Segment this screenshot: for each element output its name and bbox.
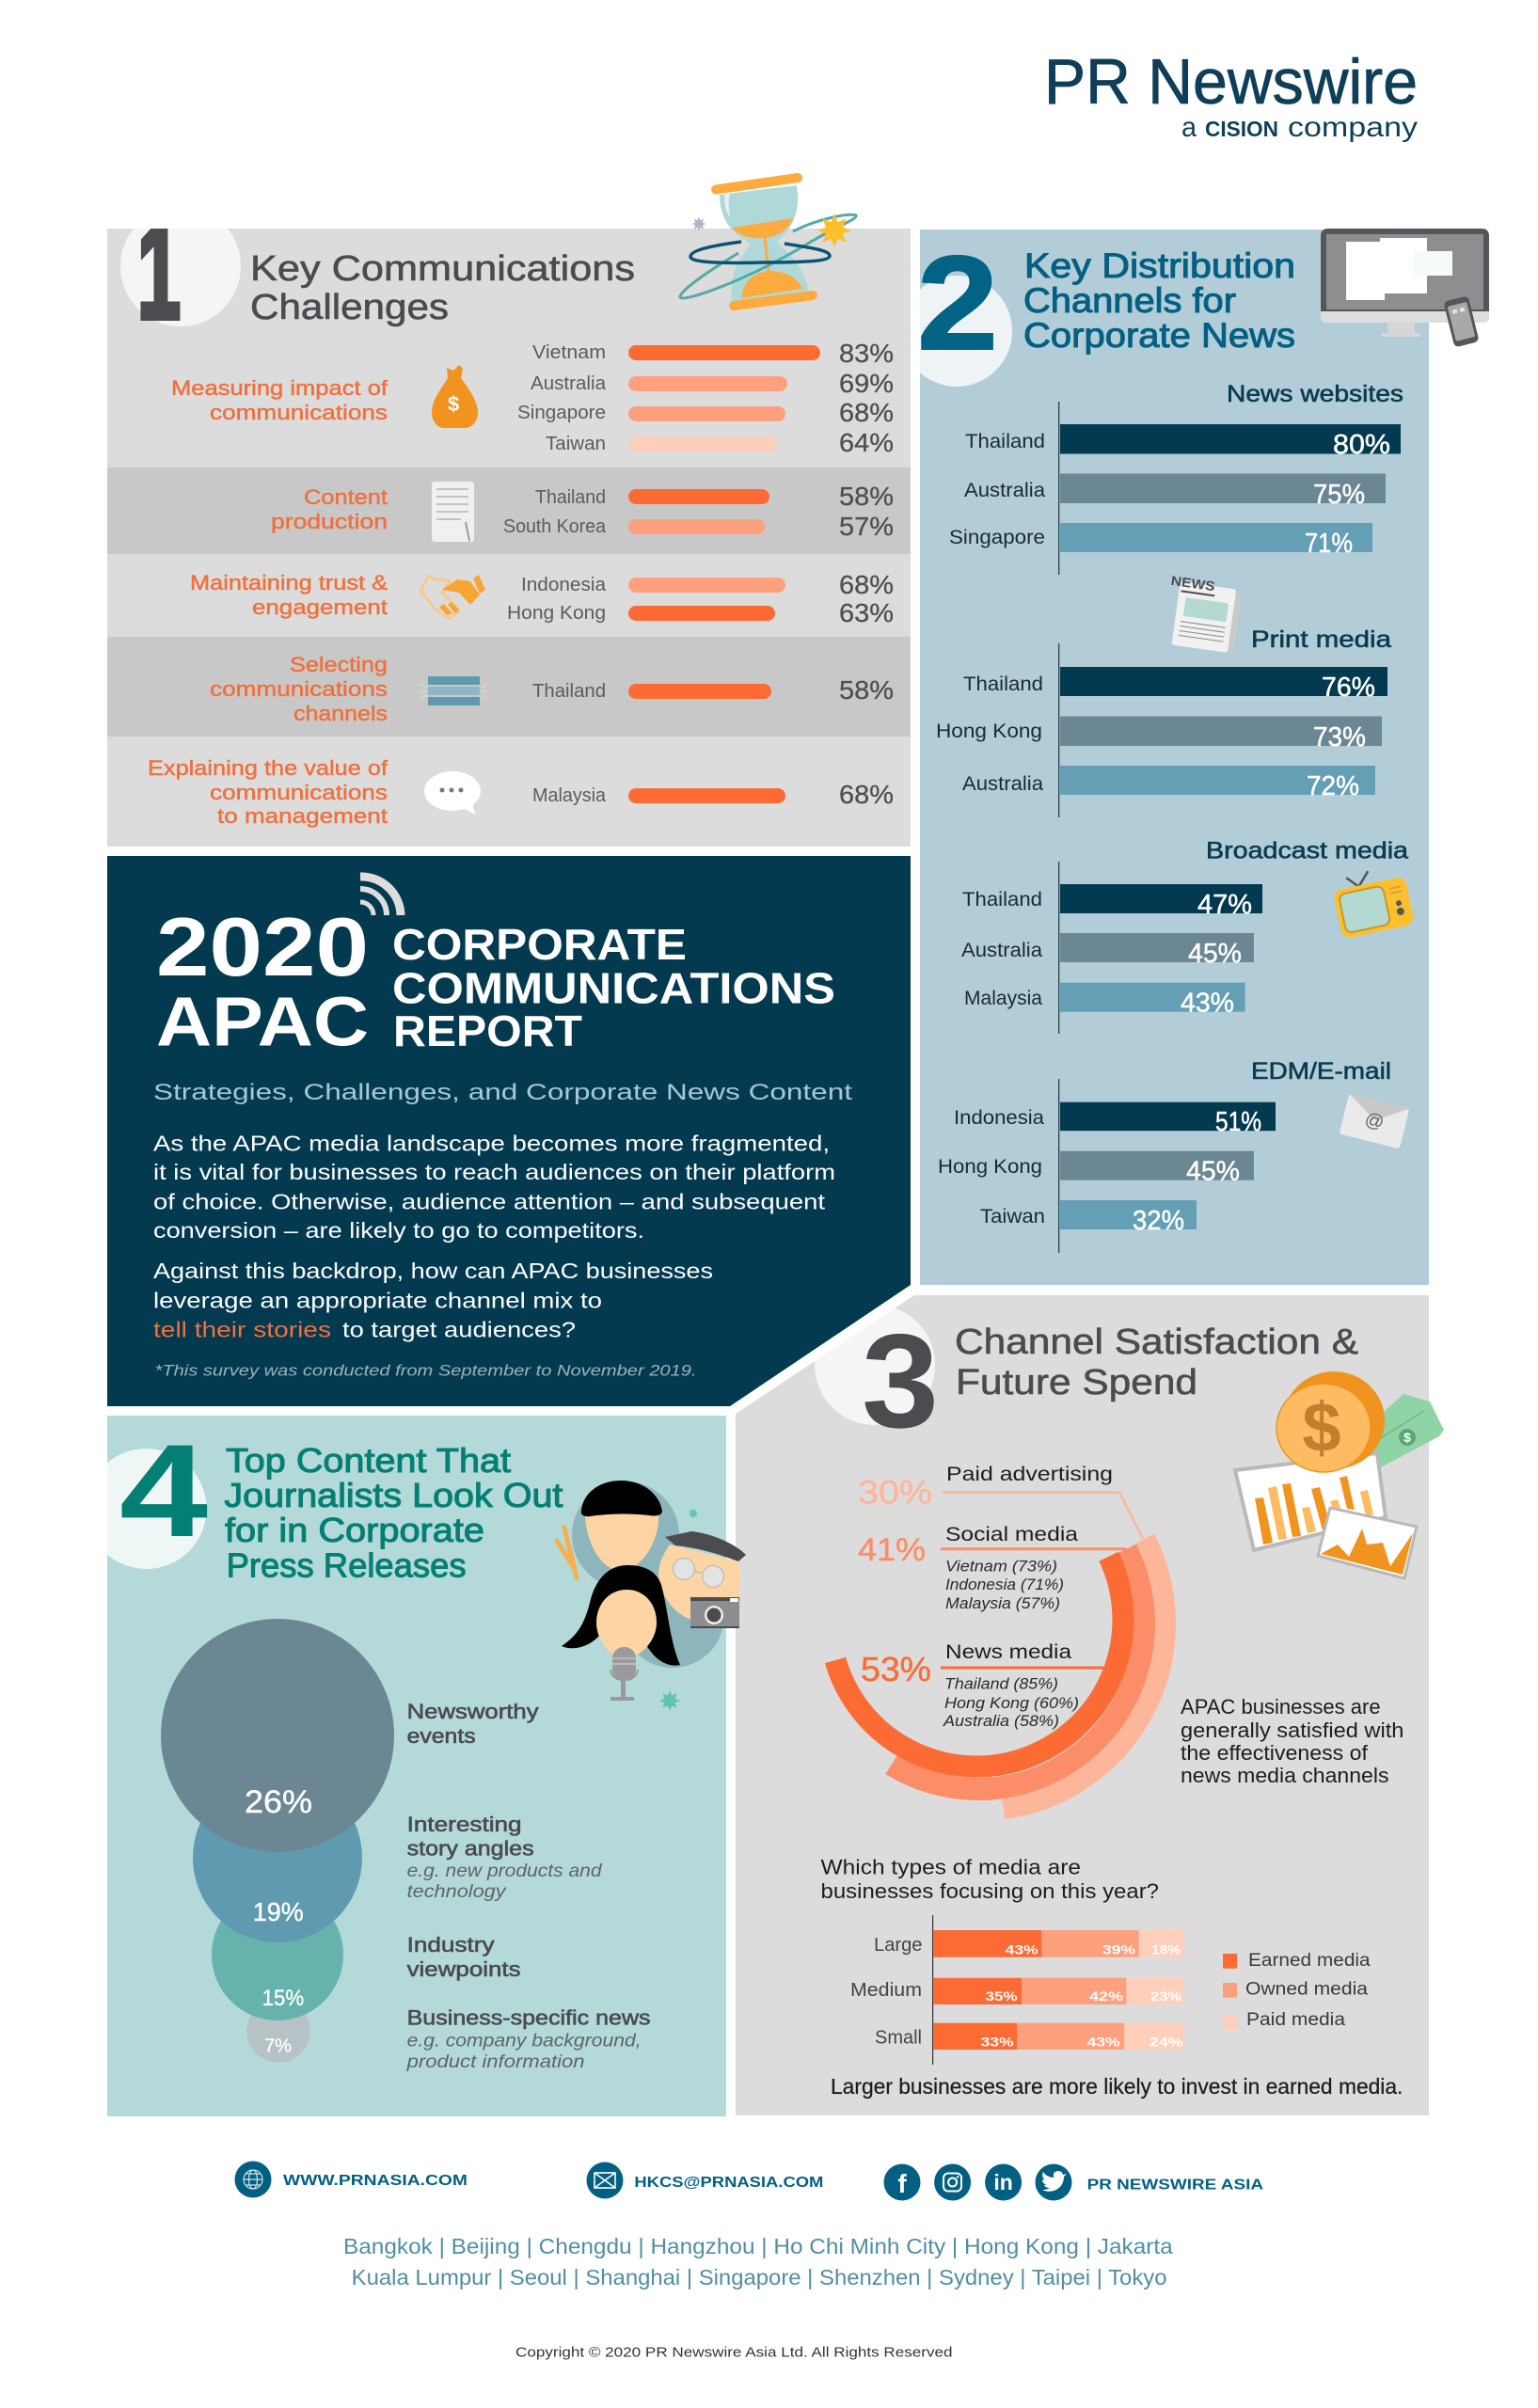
row: maintaining trust [190, 570, 894, 627]
text: satisfaction note: generally satisfied with [1181, 1719, 1403, 1742]
label: business-specific news: product information [405, 2052, 585, 2072]
callout: social media: Social media [945, 1524, 1078, 1545]
chart: news websites [949, 381, 1403, 575]
callout: social media: Malaysia (57%) [945, 1594, 1060, 1612]
chart: EDM/e-mail: 45% [1186, 1157, 1240, 1187]
icon: signal waves [360, 877, 401, 915]
heading [955, 1323, 1358, 1402]
chart: EDM/e-mail: EDM/E-mail [1251, 1058, 1391, 1085]
icon: coin, banknote and charts: $ [1302, 1388, 1341, 1466]
row: selecting channels: communications [210, 677, 388, 701]
question heading [820, 1856, 1159, 1903]
icon: chat bubble [424, 771, 481, 815]
bubble chart: 15% [262, 1986, 304, 2011]
bars and values: 83% [839, 339, 894, 368]
bar and value: 58% [839, 675, 894, 705]
footer: email [587, 2162, 823, 2199]
icon: envelope [1340, 1094, 1409, 1149]
title: 2020 APAC [156, 900, 369, 1061]
row: explaining value: communications [210, 781, 388, 804]
heading [224, 1441, 563, 1585]
panel 3: channel satisfaction and future spend [736, 1295, 1444, 2115]
chart: print media: Print media [1251, 626, 1391, 653]
title: corporate communications report: CORPORATE [392, 920, 687, 969]
row: content production: Content [304, 485, 388, 509]
chart: EDM/e-mail: Taiwan [980, 1206, 1045, 1228]
bubble chart: 26% [245, 1784, 312, 1820]
logo: PR Newswire: PR Newswire [1044, 46, 1418, 118]
chart: print media: 76% [1322, 673, 1375, 703]
callout: news media: Australia (58%) [943, 1712, 1059, 1730]
bubble chart: 19% [253, 1897, 304, 1926]
chart: stacked media focus bars: 33% [981, 2035, 1014, 2050]
illustration: journalists [557, 1481, 746, 1711]
bubble chart [161, 1619, 394, 2063]
chart: stacked media focus bars: 43% [1087, 2035, 1120, 2050]
bars and values: 64% [839, 428, 894, 457]
heading: Key Distribution [1024, 246, 1295, 285]
row: maintaining trust: engagement [252, 595, 388, 619]
text: satisfaction note [1181, 1695, 1403, 1787]
panel 2: key distribution channels [901, 229, 1429, 1285]
question paragraph: tell their stories [153, 1318, 331, 1342]
footer: website [235, 2162, 468, 2197]
row: measuring impact: communications [210, 401, 388, 424]
chart: stacked media focus bars: 18% [1151, 1942, 1181, 1957]
logo: PR Newswire: CISION [1205, 117, 1278, 141]
icon: money bag: $ [448, 392, 459, 416]
label: interesting story angles: story angles [407, 1837, 534, 1861]
chart: stacked media focus bars: 39% [1102, 1942, 1136, 1957]
heading: Future Spend [956, 1363, 1197, 1402]
callout: social media [858, 1524, 1127, 1612]
body paragraph: of choice. Otherwise, audience attention – and subsequent [153, 1189, 826, 1213]
chart: news websites: 75% [1313, 480, 1365, 510]
callout: social media: Indonesia (71%) [945, 1576, 1064, 1593]
bars and values: 63% [839, 598, 894, 627]
label: newsworthy events: Newsworthy [407, 1700, 539, 1723]
row: selecting channels: Selecting [290, 653, 388, 676]
chart: stacked media focus bars: 24% [1150, 2035, 1183, 2050]
label: newsworthy events [407, 1700, 539, 1748]
chart: broadcast media: 45% [1188, 939, 1242, 969]
bars and values: Hong Kong [507, 603, 606, 624]
bars and values [517, 339, 894, 457]
number 3 badge [815, 1308, 935, 1429]
label: interesting story angles: Interesting [407, 1813, 522, 1836]
callout: news media: News media [945, 1641, 1071, 1663]
question paragraph [153, 1259, 713, 1342]
bars and values: Thailand [535, 487, 606, 508]
title: corporate communications report: COMMUNICATIONS [392, 963, 835, 1012]
title: corporate communications report [392, 920, 835, 1055]
row: measuring impact: Measuring impact of [171, 376, 388, 400]
chart: broadcast media: 43% [1181, 989, 1234, 1019]
number 1 badge: 1 [137, 198, 181, 347]
row: explaining value: Explaining the value of [148, 756, 388, 780]
text: satisfaction note: APAC businesses are [1181, 1695, 1381, 1719]
heading: for in Corporate [225, 1511, 484, 1549]
bar and value: 68% [839, 780, 894, 809]
heading [250, 249, 635, 327]
footer: office cities: Bangkok | Beijing | Chengdu | Hangzhou | Ho Chi Minh City | Hong Kong | Jakarta [343, 2234, 1173, 2258]
footer: social links: PR NEWSWIRE ASIA [1087, 2178, 1264, 2194]
chart: broadcast media: Broadcast media [1206, 838, 1408, 864]
body paragraph: As the APAC media landscape becomes more fragmented, [153, 1131, 830, 1155]
bar and value: Malaysia [532, 785, 607, 806]
row: measuring impact [171, 339, 894, 457]
bars and values: 57% [839, 512, 894, 541]
row: maintaining trust: Maintaining trust & [190, 571, 388, 594]
icon: coin, banknote and charts: $ [1403, 1430, 1411, 1445]
bars and values: 68% [839, 570, 894, 599]
row: explaining value: to management [217, 804, 388, 828]
footer: social links: f [897, 2169, 907, 2198]
legend: Owned media [1245, 1980, 1368, 2000]
number 3 badge: 3 [862, 1307, 939, 1456]
legend: Earned media [1248, 1951, 1371, 1971]
footer: website: WWW.PRNASIA.COM [283, 2173, 468, 2189]
chart: stacked media focus bars: Small [875, 2028, 922, 2049]
logo: PR Newswire: company [1288, 112, 1418, 143]
chart: print media: Australia [962, 773, 1043, 795]
callout: social media: Vietnam (73%) [945, 1557, 1057, 1575]
chart: news websites: News websites [1227, 381, 1403, 407]
callout: news media [861, 1641, 1106, 1730]
chart: stacked media focus bars: 23% [1150, 1988, 1182, 2004]
icon: hourglass with orbit rings [680, 178, 856, 306]
chart: stacked media focus bars: 42% [1089, 1988, 1124, 2004]
chart: news websites: Thailand [965, 431, 1045, 452]
number 4 badge: 4 [119, 1417, 208, 1564]
row: selecting channels [210, 653, 894, 725]
icon: stacked lines [420, 676, 487, 705]
chart: broadcast media [961, 838, 1408, 1034]
bars and values [503, 482, 894, 541]
bars and values [507, 570, 894, 627]
bar and value [532, 780, 894, 809]
question heading: businesses focusing on this year? [820, 1879, 1159, 1903]
chart: stacked media focus bars: Medium [850, 1980, 922, 2001]
legend [1223, 1951, 1371, 2030]
chart: EDM/e-mail: Indonesia [954, 1107, 1044, 1129]
label: interesting story angles: technology [407, 1882, 507, 1902]
row: explaining value [148, 756, 894, 828]
bar and value [532, 675, 894, 705]
heading: Challenges [250, 288, 449, 327]
callout: paid advertising: Paid advertising [946, 1464, 1113, 1485]
chart: EDM/e-mail: Hong Kong [938, 1156, 1042, 1178]
bars and values: South Korea [503, 516, 607, 537]
icon: coin, banknote and charts [1235, 1371, 1444, 1578]
heading: Channel Satisfaction & [955, 1323, 1358, 1362]
question paragraph: leverage an appropriate channel mix to [153, 1289, 602, 1313]
footer: email: HKCS@PRNASIA.COM [634, 2175, 823, 2191]
question paragraph: to target audiences? [342, 1318, 576, 1342]
takeaway text: Larger businesses are more likely to invest in earned media. [831, 2074, 1403, 2099]
chart: broadcast media: 47% [1197, 890, 1252, 920]
chart: broadcast media: Australia [961, 940, 1042, 961]
panel: hero title block [107, 856, 911, 1406]
callout: social media: 41% [858, 1532, 926, 1568]
chart: print media: 72% [1307, 771, 1359, 801]
chart: stacked media focus bars: 35% [986, 1988, 1018, 2004]
label: business-specific news: e.g. company background, [407, 2032, 642, 2052]
chart: print media [936, 626, 1391, 817]
subtitle: Strategies, Challenges, and Corporate News Content [153, 1080, 852, 1105]
callout: news media: Thailand (85%) [944, 1675, 1058, 1693]
panel 4: top content journalists look out for [87, 1416, 746, 2116]
icon: newspaper [1163, 573, 1243, 654]
callout: paid advertising: 30% [858, 1475, 932, 1511]
chart: EDM/e-mail [938, 1058, 1391, 1253]
chart: stacked media focus bars [850, 1915, 1184, 2065]
chart: news websites: Australia [964, 480, 1045, 501]
chart: news websites: 71% [1305, 529, 1353, 559]
bar and value: Thailand [532, 681, 606, 702]
callout: news media: Hong Kong (60%) [944, 1694, 1079, 1712]
icon: document [432, 482, 474, 542]
panel 1: key communications challenges [107, 198, 911, 847]
row: content production [271, 482, 894, 542]
footer: social links [884, 2163, 1264, 2201]
number 2 badge: 2 [917, 229, 998, 378]
bars and values: 68% [839, 398, 894, 427]
chart: EDM/e-mail: 32% [1133, 1206, 1184, 1236]
body paragraph: it is vital for businesses to reach audiences on their platform [153, 1160, 835, 1184]
bars and values: Vietnam [532, 342, 606, 363]
chart: satisfaction arcs [835, 1539, 1165, 1809]
icon: handshake [420, 575, 485, 619]
label: industry viewpoints: viewpoints [407, 1957, 521, 1981]
footer: social links: in [993, 2170, 1013, 2194]
bars and values: Australia [531, 373, 607, 394]
icon: envelope: @ [1362, 1109, 1387, 1133]
chart: stacked media focus bars: Large [874, 1935, 922, 1956]
heading: Journalists Look Out [224, 1476, 563, 1514]
chart: print media: Thailand [963, 673, 1043, 695]
chart: EDM/e-mail: 51% [1215, 1107, 1261, 1137]
chart: print media: Hong Kong [936, 721, 1042, 742]
question heading: Which types of media are [820, 1856, 1081, 1879]
label: business-specific news [405, 2006, 651, 2072]
row: selecting channels: channels [293, 702, 388, 725]
label: interesting story angles [407, 1813, 603, 1902]
footer: copyright: Copyright © 2020 PR Newswire Asia Ltd. All Rights Reserved [515, 2345, 952, 2361]
bars and values: Indonesia [521, 575, 607, 595]
text: satisfaction note: the effectiveness of [1181, 1741, 1369, 1765]
number 2 badge [920, 254, 1012, 387]
title: 2020 APAC: 2020 [156, 900, 369, 993]
logo: PR Newswire: a [1181, 112, 1197, 143]
number 1 badge [120, 229, 241, 326]
row: content production: production [271, 510, 388, 533]
label: interesting story angles: e.g. new products and [407, 1861, 603, 1881]
chart: stacked media focus bars: 43% [1006, 1942, 1039, 1957]
chart: news websites: 80% [1333, 430, 1390, 460]
bars and values: 58% [839, 482, 894, 511]
heading: Corporate News [1023, 316, 1295, 355]
heading: Top Content That [226, 1441, 511, 1480]
bars and values: Singapore [517, 403, 606, 423]
chart: broadcast media: Thailand [962, 889, 1042, 911]
body paragraph: conversion – are likely to go to competitors. [153, 1218, 644, 1243]
body paragraph [153, 1131, 835, 1243]
heading: Channels for [1023, 281, 1236, 320]
icon: television [1330, 863, 1415, 939]
heading [1023, 246, 1295, 355]
bars and values: Taiwan [546, 434, 606, 454]
legend: Paid media [1246, 2010, 1345, 2030]
footer: office cities [343, 2234, 1173, 2289]
label: newsworthy events: events [407, 1724, 476, 1748]
callout: paid advertising [858, 1464, 1143, 1539]
label: industry viewpoints [407, 1933, 521, 1981]
heading: Press Releases [227, 1546, 467, 1585]
survey footnote: *This survey was conducted from September to November 2019. [154, 1362, 696, 1380]
footer: office cities: Kuala Lumpur | Seoul | Shanghai | Singapore | Shenzhen | Sydney | Taipei | Tokyo [352, 2265, 1166, 2289]
callout: news media: 53% [861, 1650, 931, 1688]
icon: newspaper: NEWS [1170, 573, 1216, 594]
chart: broadcast media: Malaysia [964, 988, 1042, 1009]
label: industry viewpoints: Industry [407, 1933, 495, 1956]
bars and values: 69% [839, 369, 894, 398]
chart: print media: 73% [1313, 722, 1366, 752]
icon: monitor and phone [1321, 229, 1489, 347]
chart: news websites: Singapore [949, 527, 1045, 548]
title: corporate communications report: REPORT [393, 1006, 582, 1055]
text: satisfaction note: news media channels [1181, 1764, 1388, 1787]
heading: Key Communications [250, 249, 635, 289]
title: 2020 APAC: APAC [156, 982, 369, 1061]
icon: money bag [432, 365, 478, 428]
number 4 badge [107, 1445, 207, 1569]
question paragraph: Against this backdrop, how can APAC businesses [153, 1259, 713, 1283]
bubble chart: 7% [264, 2036, 292, 2057]
label: business-specific news: Business-specific news [407, 2006, 651, 2030]
